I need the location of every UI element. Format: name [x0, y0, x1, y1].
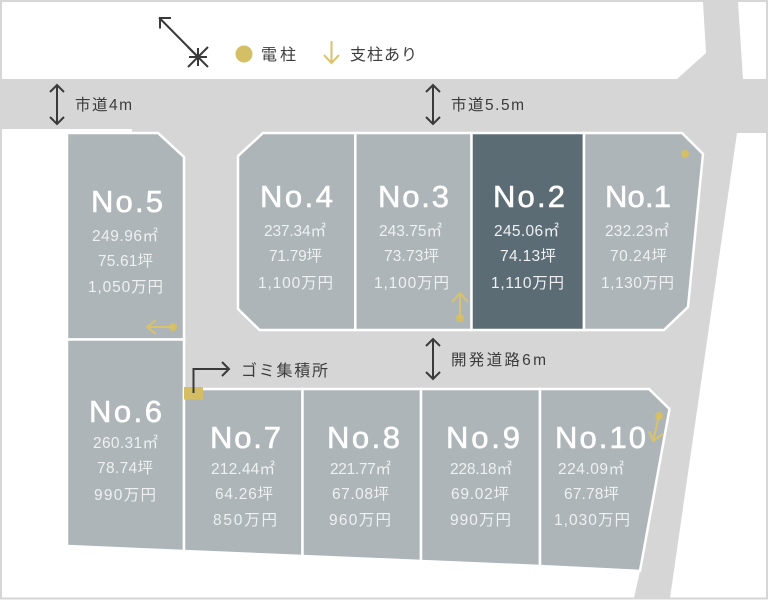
lot No.1: No.1 [605, 179, 671, 214]
legend: support wire [324, 41, 417, 64]
lot No.10: 224.09㎡ [558, 460, 624, 478]
lot No.6: 78.74坪 [97, 459, 153, 477]
lot No.9: 228.18㎡ [450, 460, 512, 478]
road width: 6m: 開発道路6m [451, 351, 546, 369]
lot No.10: No.10 [555, 420, 646, 455]
lot No.5: No.5 [91, 184, 163, 219]
road width: 4m: 市道4m [75, 96, 132, 114]
legend: support wire: 支柱あり [350, 46, 417, 64]
lot No.5 [67, 133, 184, 340]
lot No.5: 75.61坪 [98, 252, 153, 270]
lot No.2 (highlighted): 1,110万円 [491, 275, 564, 292]
support wire marker: No.10 [649, 412, 663, 441]
lot No.3: 1,100万円 [374, 275, 449, 292]
lot No.4 [238, 133, 355, 330]
lot No.10 [540, 389, 670, 571]
lot No.8 [302, 389, 421, 561]
lot No.5: 249.96㎡ [92, 227, 158, 245]
legend: utility pole [236, 46, 296, 64]
lot No.10: 67.78坪 [564, 485, 619, 503]
lot No.5: 1,050万円 [88, 279, 163, 296]
road width: 5.5m: 市道5.5m [451, 96, 524, 114]
lot No.8: 221.77㎡ [330, 460, 391, 478]
lot No.2 (highlighted): 74.13坪 [500, 247, 556, 265]
garbage collection point: ゴミ集積所 [241, 361, 328, 380]
lot No.1: 232.23㎡ [605, 222, 669, 240]
legend: utility pole: 電柱 [261, 46, 296, 64]
pole marker: No.1 [681, 150, 689, 158]
garbage collection point [184, 361, 328, 400]
lot No.10: 1,030万円 [554, 512, 630, 529]
lot No.6: 990万円 [94, 487, 156, 504]
lot No.7: 64.26坪 [215, 485, 273, 503]
lot No.1 [584, 133, 703, 330]
lot No.3: 243.75㎡ [379, 222, 442, 240]
lot No.9: 990万円 [450, 512, 511, 529]
lot No.2 (highlighted): 245.06㎡ [494, 222, 559, 240]
road width: 6m [426, 339, 546, 379]
lot No.6: No.6 [89, 394, 162, 429]
lot No.9 [421, 389, 540, 566]
support wire marker: No.5 [147, 320, 177, 334]
lot No.8: No.8 [327, 420, 400, 455]
lot No.1: 1,130万円 [601, 275, 674, 292]
lot No.1: 70.24坪 [610, 247, 667, 265]
lot No.6: 260.31㎡ [93, 434, 158, 452]
support wire marker: No.3 [452, 293, 468, 322]
lot No.6 [67, 340, 184, 551]
lot No.9: 69.02坪 [451, 485, 509, 503]
lot No.2 (highlighted) [472, 133, 584, 330]
lot No.2 (highlighted): No.2 [493, 179, 565, 214]
lot No.3 [355, 133, 472, 330]
lot No.3: 73.73坪 [384, 247, 439, 265]
lot No.8: 960万円 [329, 512, 391, 529]
compass north arrow [159, 18, 208, 67]
lot No.4: No.4 [260, 179, 333, 214]
lot No.7: No.7 [210, 420, 281, 455]
lot No.4: 1,100万円 [258, 275, 333, 292]
lot No.9: No.9 [446, 420, 520, 455]
lot No.3: No.3 [378, 179, 449, 214]
lot No.8: 67.08坪 [332, 485, 389, 503]
lot No.4: 71.79坪 [269, 247, 322, 265]
road width: 5.5m [426, 85, 524, 124]
lot No.7: 850万円 [213, 512, 277, 529]
lot No.4: 237.34㎡ [264, 222, 326, 240]
lot No.7 [184, 389, 302, 556]
lot No.7: 212.44㎡ [211, 460, 275, 478]
road width: 4m [50, 85, 132, 124]
